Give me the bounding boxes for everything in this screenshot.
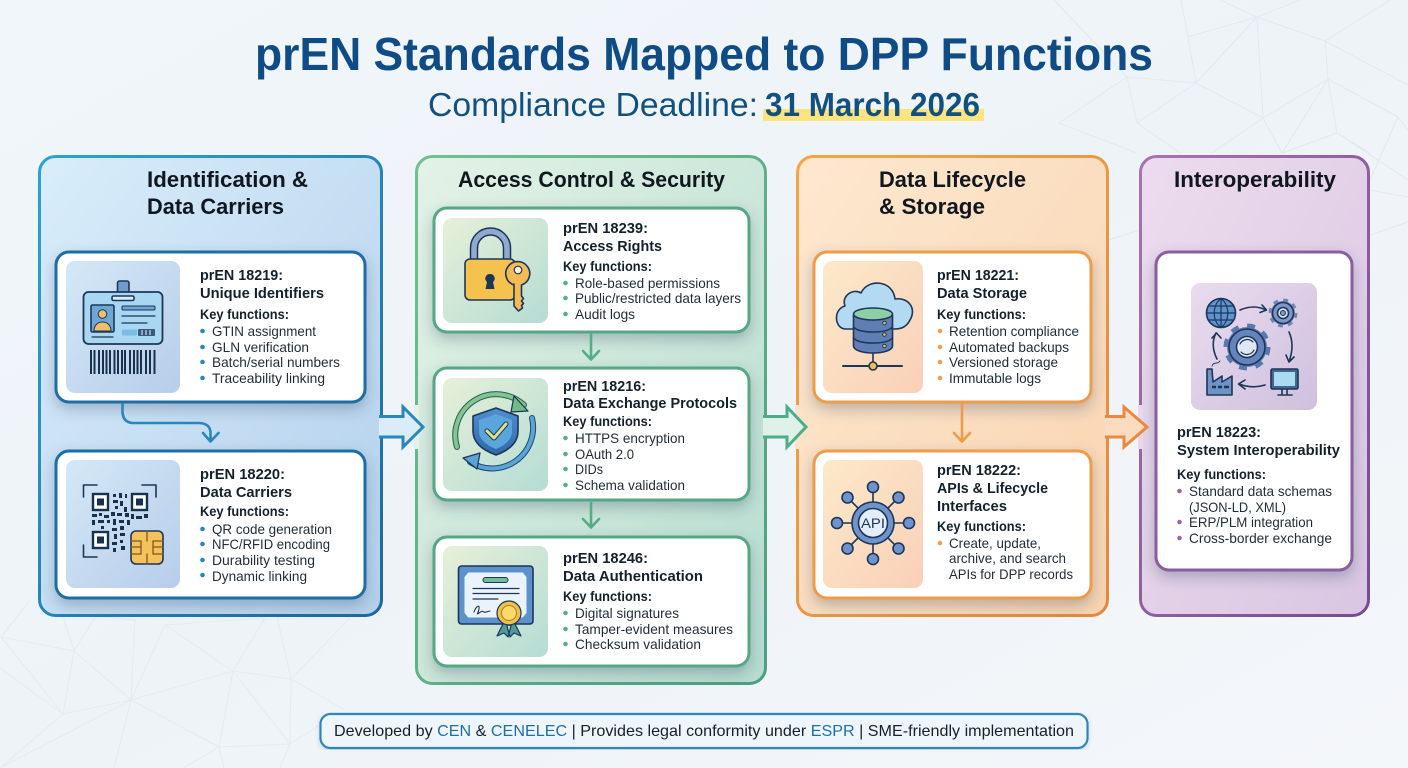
text: prEN 18216 details: OAuth 2.0 bbox=[575, 446, 634, 462]
text: prEN 18220 details: QR code generation bbox=[212, 521, 332, 537]
text: prEN 18216 details: prEN 18216: bbox=[563, 378, 646, 395]
card: prEN 18221 bbox=[814, 252, 1091, 402]
background network pattern bottom left bbox=[0, 600, 350, 768]
background network pattern top right bbox=[1054, 0, 1408, 240]
text: prEN 18216 details: Schema validation bbox=[575, 477, 685, 493]
text: prEN 18222 details: Interfaces bbox=[937, 498, 1007, 515]
text: prEN 18239 details: Access Rights bbox=[563, 238, 662, 255]
card: prEN 18246 bbox=[434, 537, 749, 666]
panel heading bbox=[879, 167, 1026, 219]
panel heading: Identification & bbox=[147, 167, 308, 192]
text: prEN 18223 details: Key functions: bbox=[1177, 466, 1266, 482]
text: prEN 18223 details: System Interoperability bbox=[1177, 442, 1341, 459]
icon: shield with sync arrows bbox=[455, 394, 533, 469]
text: prEN 18239 details bbox=[563, 220, 741, 322]
title: prEN Standards Mapped to DPP Functions bbox=[255, 28, 1153, 80]
icon: QR code with chip bbox=[84, 485, 163, 564]
text: prEN 18221 details: Key functions: bbox=[937, 306, 1026, 322]
panel heading: & Storage bbox=[879, 194, 985, 219]
text: prEN 18220 details bbox=[200, 466, 332, 584]
text: prEN 18222 details: Key functions: bbox=[937, 518, 1026, 534]
arrow: 18221 to 18222 bbox=[954, 404, 970, 442]
text: prEN 18223 details: Standard data schemas bbox=[1189, 483, 1332, 499]
subtitle: compliance deadline bbox=[428, 86, 984, 123]
text: prEN 18222 details: archive, and search bbox=[949, 550, 1066, 566]
panel heading: Access Control & Security bbox=[458, 167, 725, 192]
arrow: 18219 to 18220 bbox=[122, 404, 218, 442]
panel: data lifecycle and storage bbox=[798, 156, 1108, 616]
text: prEN 18223 details: Cross-border exchange bbox=[1189, 530, 1332, 546]
text: prEN 18222 details: Create, update, bbox=[949, 535, 1041, 551]
footer text: Developed by CEN & CENELEC | Provides legal conformity under ESPR | SME-friendly implementation bbox=[334, 723, 1074, 740]
text: prEN 18223 details: prEN 18223: bbox=[1177, 424, 1261, 441]
text: prEN 18223 details: (JSON-LD, XML) bbox=[1189, 499, 1286, 515]
text: prEN 18221 details: Retention compliance bbox=[949, 323, 1079, 339]
text: prEN 18246 details: Data Authentication bbox=[563, 568, 703, 585]
card: prEN 18223 bbox=[1156, 252, 1352, 570]
text: prEN 18246 details: Key functions: bbox=[563, 588, 652, 604]
text: prEN 18219 details: GTIN assignment bbox=[212, 323, 316, 339]
icon: cloud database bbox=[836, 283, 912, 370]
text: prEN 18246 details: Tamper-evident measures bbox=[575, 621, 733, 637]
text: prEN 18239 details: Audit logs bbox=[575, 306, 635, 322]
text: prEN 18220 details: Dynamic linking bbox=[212, 568, 307, 584]
icon: API hub bbox=[832, 482, 914, 564]
icon: interoperability cycle bbox=[1206, 298, 1298, 395]
panel heading bbox=[147, 167, 308, 219]
text: prEN 18222 details bbox=[937, 462, 1073, 582]
text: prEN 18216 details: DIDs bbox=[575, 461, 603, 477]
deadline highlight bbox=[763, 109, 984, 121]
text: prEN 18220 details: Key functions: bbox=[200, 503, 289, 519]
text: prEN 18219 details: Batch/serial numbers bbox=[212, 354, 340, 370]
text: prEN 18246 details: Digital signatures bbox=[575, 605, 679, 621]
arrow: data lifecycle to interoperability bbox=[1105, 405, 1147, 449]
text: prEN 18246 details bbox=[563, 550, 733, 652]
card: prEN 18220 bbox=[56, 451, 365, 598]
icon: API hub: API bbox=[861, 515, 885, 531]
text: prEN 18221 details: Immutable logs bbox=[949, 370, 1041, 386]
text: prEN 18220 details: Data Carriers bbox=[200, 484, 292, 501]
text: prEN 18216 details: HTTPS encryption bbox=[575, 430, 685, 446]
deadline label: Compliance Deadline: bbox=[428, 86, 758, 123]
icon: id badge with barcode bbox=[84, 281, 162, 374]
text: prEN 18221 details: Automated backups bbox=[949, 339, 1069, 355]
text: prEN 18239 details: prEN 18239: bbox=[563, 220, 648, 237]
text: prEN 18246 details: prEN 18246: bbox=[563, 550, 648, 567]
text: prEN 18219 details: Key functions: bbox=[200, 306, 289, 322]
deadline date: 31 March 2026 bbox=[765, 86, 980, 123]
text: prEN 18219 details: prEN 18219: bbox=[200, 267, 283, 284]
text: prEN 18221 details: prEN 18221: bbox=[937, 267, 1019, 284]
text: prEN 18219 details bbox=[200, 267, 340, 386]
text: prEN 18216 details: Data Exchange Protocols bbox=[563, 395, 737, 412]
panel: access control and security bbox=[416, 156, 766, 684]
arrow: 18216 to 18246 bbox=[583, 503, 599, 528]
icon: certificate with seal bbox=[458, 566, 533, 637]
text: prEN 18223 details bbox=[1177, 424, 1341, 546]
text: prEN 18221 details: Versioned storage bbox=[949, 354, 1058, 370]
arrow: identification to access control bbox=[379, 405, 423, 449]
text: prEN 18219 details: GLN verification bbox=[212, 339, 309, 355]
text: prEN 18219 details: Unique Identifiers bbox=[200, 285, 324, 302]
card: prEN 18222 bbox=[814, 451, 1091, 598]
text: prEN 18216 details bbox=[563, 378, 737, 493]
card: prEN 18239 bbox=[434, 208, 749, 332]
text: prEN 18216 details: Key functions: bbox=[563, 413, 652, 429]
text: prEN 18220 details: NFC/RFID encoding bbox=[212, 536, 330, 552]
text: prEN 18221 details bbox=[937, 267, 1079, 386]
panel heading: Data Lifecycle bbox=[879, 167, 1026, 192]
panel: identification and data carriers bbox=[40, 156, 382, 616]
text: prEN 18222 details: APIs for DPP records bbox=[949, 566, 1073, 582]
text: prEN 18220 details: prEN 18220: bbox=[200, 466, 285, 483]
card: prEN 18219 bbox=[56, 252, 365, 402]
arrow: access control to data lifecycle bbox=[763, 405, 806, 449]
panel: interoperability bbox=[1140, 156, 1368, 616]
icon: padlock and key bbox=[465, 232, 530, 311]
text: prEN 18239 details: Key functions: bbox=[563, 258, 652, 274]
card: prEN 18216 bbox=[434, 368, 749, 500]
footer bar bbox=[320, 714, 1088, 748]
panel heading: Data Carriers bbox=[147, 194, 284, 219]
text: prEN 18222 details: prEN 18222: bbox=[937, 462, 1021, 479]
text: prEN 18223 details: ERP/PLM integration bbox=[1189, 514, 1313, 530]
text: prEN 18246 details: Checksum validation bbox=[575, 636, 701, 652]
arrow: 18239 to 18216 bbox=[583, 334, 599, 360]
panel heading: Interoperability bbox=[1174, 167, 1336, 192]
text: prEN 18219 details: Traceability linking bbox=[212, 370, 325, 386]
text: prEN 18220 details: Durability testing bbox=[212, 552, 315, 568]
text: prEN 18239 details: Public/restricted data layers bbox=[575, 290, 741, 306]
text: prEN 18239 details: Role-based permissions bbox=[575, 275, 720, 291]
text: prEN 18222 details: APIs & Lifecycle bbox=[937, 480, 1048, 497]
text: prEN 18221 details: Data Storage bbox=[937, 285, 1027, 302]
